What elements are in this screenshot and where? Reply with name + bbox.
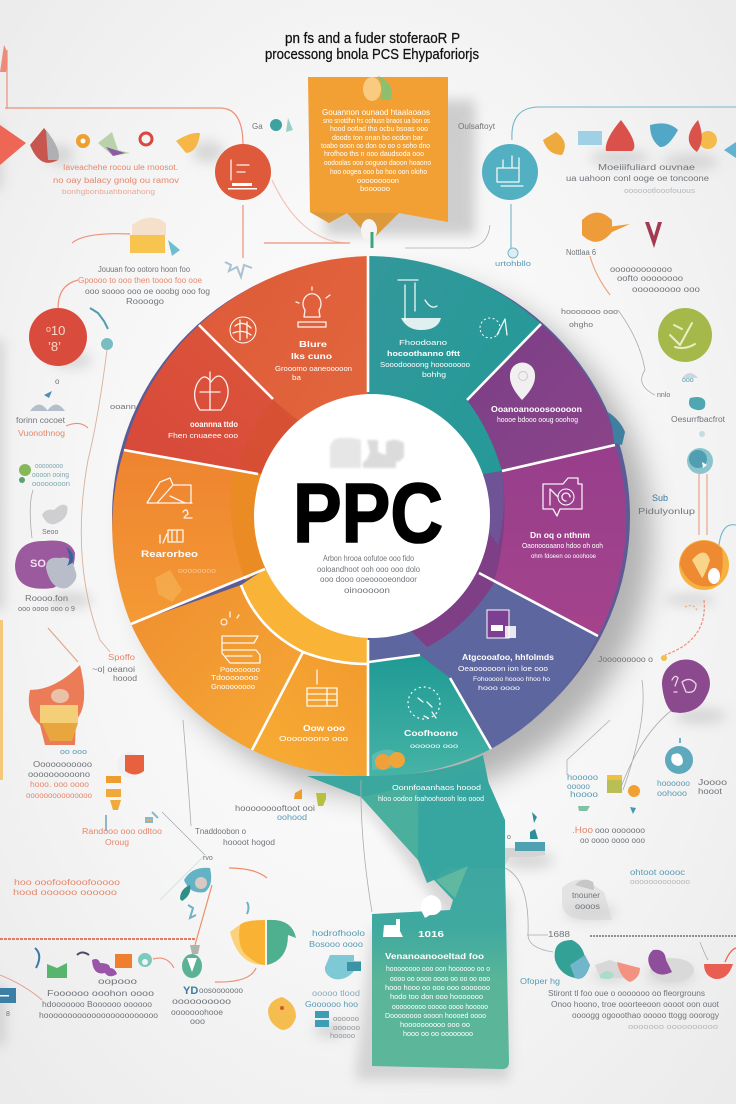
text: bottom left block: oopooo [98, 977, 138, 986]
orange lower content [211, 612, 260, 691]
card text: hood ootlad tho ocbu bsoas ooo [330, 124, 428, 133]
label: beside wheel left: Spoffo [108, 653, 136, 662]
card text: ooooooooon [357, 176, 399, 185]
text: top left block: bonhgbonbuahbonahong [62, 189, 155, 196]
text: bottom left block: hoooooooooooooooooooooooo [39, 1011, 159, 1020]
text: right upper block: ooooooooo ooo [632, 285, 701, 294]
segment: purple right [430, 445, 626, 636]
card text: sno snotdhn frs oohusn bnaos ua bon os [323, 116, 430, 125]
card text: hoo oogea ooo bo hoo oon oloho [330, 167, 427, 176]
panel: orange top card [308, 76, 475, 248]
segment: purple top [467, 324, 615, 471]
inner ring: orange [231, 470, 268, 580]
teal top content: Fhoodoano [399, 338, 447, 347]
icon row: bottom right [555, 940, 736, 982]
purple right content [522, 478, 603, 560]
text: top left block: no oay balacy gnolg ou ramov [53, 176, 179, 185]
PPC wheel [112, 256, 630, 776]
teal top content [380, 280, 507, 379]
icon: teal marker with line [81, 308, 113, 652]
red top content: lks cuno [291, 351, 332, 361]
labels: far right: hoooooo [657, 779, 691, 788]
card text: hoooooooo ooo oon hoooooo oo o [386, 964, 490, 973]
label: salmon: hood oooooo oooooo [13, 888, 118, 897]
label: right middle: Sub [652, 493, 668, 503]
labels: far right: hooot [698, 787, 723, 796]
label: beside wheel left: ~o| oeanoi [92, 665, 135, 674]
left edge strip [0, 620, 3, 780]
purple top content [491, 362, 582, 424]
segment: blue [369, 573, 598, 749]
icon: blue box left edge [0, 988, 16, 1018]
segment: orange left [112, 450, 371, 624]
connector lines right [567, 256, 736, 790]
text: lower left block: oooooooooono [28, 770, 91, 779]
text: top right block [566, 163, 710, 195]
text: VD block: ooooooohooe [171, 1008, 224, 1017]
teal bottom content: Coofhoono [404, 729, 458, 738]
text: red line: ooo ooooooo [595, 826, 646, 835]
green icon text: oooooooon [32, 481, 70, 488]
segment: orange lower [131, 585, 303, 750]
inner ring: red [238, 400, 310, 474]
green icon text: oooon ooing [32, 472, 69, 479]
teal top content: bohhg [422, 370, 446, 379]
icon: purple blob: ooo oooo ooo o 9 [18, 606, 75, 613]
card text: toabo ooon oo don oo oo o soho dno [321, 141, 430, 150]
icon: red jar and orange stack [106, 752, 158, 831]
icons: right small cluster [657, 373, 726, 437]
text: lower left block: ooooooooooooooo [26, 791, 93, 800]
labels: far right: hooooo [567, 773, 599, 782]
text: bottom left block: hdooooooo Boooooo oooooo [42, 1000, 153, 1009]
text: VD block: ooo [190, 1017, 206, 1026]
icon: teal leaf [180, 855, 213, 918]
text: lower left block: Ooooooooooo [33, 760, 93, 769]
card text: oooo oo oooo oooo oo oo oo ooo [390, 974, 490, 983]
left column [0, 265, 372, 1040]
icon: small teal plants: o [507, 834, 511, 841]
title: processong bnola PCS Ehypaforiorjs [265, 46, 479, 63]
center circle [254, 394, 490, 638]
labels: lower middle left: Tnaddoobon o [195, 827, 247, 836]
green icon text [19, 463, 70, 538]
card text: hodo too don ooo hooooooo [390, 992, 483, 1001]
card text: hooo hooo oo ooo ooo ooooooo [385, 983, 490, 992]
text: VD block: YD [183, 985, 198, 997]
icon: orange cup and wine glass: Nottlaa 6 [566, 248, 597, 257]
text: gray labels: ohtoot ooooc [630, 868, 685, 877]
segment: yellow bottom [252, 652, 367, 776]
blue content: Fohooooo hoooo hhoo ho [473, 676, 550, 683]
teal bottom content: oooooo ooo [410, 743, 459, 750]
segment icons and text [141, 280, 603, 770]
ribbon text [378, 783, 484, 803]
labels: bottom middle: Goooooo hoo [305, 1000, 359, 1009]
labels: lower middle left: oohood [277, 813, 307, 822]
text: VD block: oooooooooo [172, 997, 232, 1006]
teal top content: hocoothanno 0ftt [387, 349, 461, 358]
blue content: Atgcooafoo, hhfolmds [462, 652, 554, 662]
text: right upper block: oofto oooooooo [617, 274, 684, 283]
purple right content: Dn oq o nthnm [530, 531, 590, 540]
icons: right small cluster: ooo [682, 377, 694, 384]
labels: far right [567, 773, 728, 799]
text: bottom left block: Foooooo ooohon oooo [47, 989, 155, 998]
red left content: ooannna ttdo [190, 419, 238, 429]
labels: lower middle left [82, 789, 326, 847]
icon: gray cloud with label [562, 880, 612, 920]
icon: card bubble: 1016 [418, 929, 444, 939]
yellow bottom content: Ooooooono ooo [279, 734, 348, 743]
icon: purple pin [662, 659, 710, 713]
text: bottom right block: ooooooo oooooooooo [628, 1024, 718, 1031]
ribbon text: hloo oodoo foahoohoooh loo oood [378, 796, 484, 803]
orange lower content: Tdoooooooo [211, 673, 258, 682]
small labels top [252, 118, 496, 132]
text: left upper block: ooo soooo ooo oe ooobg ooo fog [85, 287, 210, 296]
center text: ooloandhoot ooh ooo ooo dolo [317, 565, 421, 574]
text: VD block: oosooooooo [199, 986, 244, 995]
icon: orange fruit [372, 749, 405, 770]
text and hills left: forinn cocoet [16, 416, 66, 425]
text and hills left [16, 377, 88, 438]
teal ribbon and green card [307, 755, 509, 1080]
text: right upper block: ohgho [569, 320, 593, 329]
orange left content [141, 478, 216, 602]
label: right middle: Pidulyonlup [638, 507, 696, 516]
text: gray labels: ooooooooooooo [630, 879, 690, 886]
center text: ooo dooo ooeooooeondoor [320, 575, 417, 584]
red left content: Fhen cnuaeee ooo [168, 431, 238, 440]
card text: doods ton onan bo ocdon bar [332, 133, 423, 142]
text: bottom right block: oooogg ogooothao ooooo ttogg ooorogy [572, 1011, 719, 1020]
text: left upper block [78, 265, 210, 306]
text: gray labels [630, 868, 690, 886]
card text: hrofhoo ths n ooo daudsoda ooo [324, 149, 424, 158]
text: bottom left block [39, 977, 159, 1020]
icon: gray cloud with label: tnouner [572, 891, 600, 900]
labels: bottom middle: ooooo tlood [312, 989, 360, 998]
card text: ooooooooo ooooo oooo hooooo [392, 1002, 488, 1011]
icon: red circle left: ᵒ10 [46, 323, 65, 338]
icon: red circle top [215, 144, 271, 200]
ribbon text: Oonnfoaanhaos hoood [392, 783, 481, 792]
icon: small yellow cup left [72, 217, 180, 256]
labels: lower middle left: hoooot hogod [223, 838, 275, 847]
text: left upper block: Roooogo [126, 297, 165, 306]
icon: purple blob: Roooo.fon [25, 594, 68, 603]
dividers [124, 256, 615, 776]
text: VD block [171, 985, 244, 1026]
icons: right small cluster: nnlo [657, 392, 670, 399]
title: pn fs and a fuder stoferaoR P [285, 30, 460, 47]
icons: right small cluster: Oesurrfbacfrot [671, 415, 726, 424]
segment: red top [199, 256, 368, 517]
purple top content: Ooanoanooosooooon [491, 405, 582, 414]
label: beside wheel left: hoood [113, 674, 137, 683]
icon: teal circle top [482, 144, 538, 200]
purple right content: Oaonoooaano hdoo oh ooh [522, 541, 603, 550]
green icon text: oooooooo [35, 463, 63, 470]
purple right content: ohm fdoeen oo ooohooe [531, 553, 596, 560]
center text: oinooooon [344, 586, 390, 595]
card text: Gouannon ounaod htaalaoaos [322, 107, 430, 117]
labels: far right: hoooo [570, 790, 599, 799]
label: beside wheel left: ooann [110, 404, 136, 411]
blue content [458, 610, 554, 692]
connector and dotted line right: 1688 [548, 930, 571, 939]
labels: bottom middle [268, 929, 366, 1040]
right column [505, 256, 736, 1031]
labels: bottom middle: Bosooo oooo [309, 940, 364, 949]
icon: card pin [361, 219, 377, 248]
line and orange blob: oo ooo [60, 749, 87, 756]
icon: green circle [658, 308, 712, 362]
segment: teal top [368, 256, 541, 560]
labels: far right: ooooo [567, 782, 591, 791]
icon: orange circle [679, 540, 729, 590]
blue content: hooo oooo [478, 685, 521, 692]
text: right upper block [561, 265, 701, 329]
red left content [168, 372, 238, 440]
red top content: Blure [299, 339, 327, 349]
inner ring: yellow [241, 569, 368, 664]
icon: card leaf [363, 76, 392, 101]
connector lines lower left [0, 720, 372, 1000]
text: red line: oo oooo oooo ooo [580, 836, 646, 845]
icon: small blue icons above wheel: urtohbllo [495, 261, 531, 268]
inner ring: purple [400, 471, 505, 647]
red top content [230, 287, 352, 382]
label: salmon: hoo ooofoofooofooooo [14, 878, 121, 887]
purple top content: hoooe bdooo ooug ooohog [497, 415, 578, 424]
segment: red left [124, 325, 371, 517]
labels: lower middle left: hooooooooftoot ooi [235, 804, 315, 813]
labels: far right: oohooo [657, 789, 688, 798]
text and hills left: o [55, 377, 60, 386]
icon row: top left shapes [0, 125, 200, 165]
small labels top: Oulsaftoyt [458, 122, 496, 131]
teal top content: Sooodoooong hoooooooo [380, 360, 470, 369]
green icon text: Seoo [42, 529, 58, 536]
icon: small teal plants [505, 812, 545, 865]
card text [321, 107, 431, 193]
icon: purple blob: SO [30, 558, 46, 570]
title [265, 30, 479, 63]
text: bottom right block: Ofoper hg [520, 977, 560, 986]
icon row: bottom left [35, 948, 174, 978]
text: top right block: Moeiiifuliard ouvnae [598, 163, 696, 172]
labels: lower middle left: Oroug [105, 838, 129, 847]
text: top left block [53, 163, 179, 196]
PPC label: PPC [293, 466, 443, 560]
orange lower content: Gnoooooooo [211, 682, 255, 691]
text: left upper block: Gpoooo to ooo then toooo foo ooe [78, 276, 203, 285]
icon: small blue icons above wheel [225, 248, 531, 277]
icon: card bubble [383, 895, 444, 939]
text: bottom right block: Onoo hoono, troe ooorteeoon oooot oon ouot [551, 1000, 720, 1009]
labels: bottom middle: hooooo [330, 1033, 355, 1040]
labels: far right: Joooo [698, 778, 728, 787]
text: top right block: ooooootlooofouous [624, 188, 696, 195]
text and hills left: Vuonothnog [18, 429, 65, 438]
text: top right block: ua uahoon conl ooge oe toncoone [566, 174, 710, 183]
labels: bottom middle: hodrofhoolo [312, 929, 366, 938]
icon: purple blob [15, 540, 76, 613]
center text [317, 554, 421, 595]
line and orange blob [29, 628, 87, 756]
icon: center cloud [330, 438, 404, 468]
small labels top: Ga [252, 122, 263, 131]
blue content: Oeaoooooon ion loe ooo [458, 664, 548, 673]
icon: gray cloud with label: oooos [575, 902, 600, 911]
icon: blue box left edge: 8 [6, 1011, 10, 1018]
text: red line [572, 825, 646, 845]
orange left content: oooooooo [178, 566, 216, 575]
icon: teal globe [665, 738, 693, 774]
label: salmon [13, 878, 121, 897]
card text: oodoolas ooo ooguoo daoon hoaono [324, 158, 431, 167]
card text: Doooooooo oooon hoooed oooo [385, 1011, 486, 1020]
text: bottom right block: Stiront tl foo oue o ooooooo oo fleorgrouns [548, 989, 705, 998]
connector and dotted line right [505, 868, 736, 960]
center text: Arbon hrooa oofutoe ooo fido [323, 554, 414, 563]
red top content: ba [292, 373, 302, 382]
card text: hoooooooooo ooo oo [400, 1020, 470, 1029]
segment: teal bottom [369, 655, 491, 776]
icon: orange cup and wine glass [566, 212, 662, 257]
teal bottom content [372, 687, 459, 770]
text: red line: .Hoo [572, 825, 593, 835]
text: lower left block: hooo. ooo oooo [30, 780, 90, 789]
wheel rim [112, 258, 630, 776]
icon: yellow grid and orange fruit [578, 775, 640, 814]
labels: lower middle left: Randooo ooo odltoo [82, 827, 163, 836]
text: right upper block: hooooooo ooo [561, 307, 618, 316]
text: top left block: Iaveachehe rocou ule rnoosot. [63, 163, 178, 172]
label: beside wheel right [598, 606, 697, 664]
orange left content: Rearorbeo [141, 549, 199, 559]
card text: Venanoanooeltad foo [385, 951, 484, 961]
yellow bottom content: Oow ooo [303, 723, 345, 733]
connector lines top [0, 45, 736, 258]
card text [385, 951, 490, 1038]
icon row: top right shapes [543, 120, 736, 158]
text: left upper block: Jouuan foo ootoro hoon foo [98, 265, 191, 274]
orange lower content: Poooooooo [220, 665, 260, 674]
text: bottom right block [520, 977, 720, 1031]
icon: red circle left: ’8’ [48, 339, 61, 354]
icon: teal small circle [687, 448, 713, 474]
labels: bottom middle: oooooo [333, 1016, 359, 1023]
icon: green leaf circle [182, 945, 202, 978]
red top content: Grooomo oaneooooon [275, 364, 352, 373]
wheel drop shadow [132, 278, 652, 798]
label: beside wheel right: Jooooooooo o [598, 655, 654, 664]
text: lower left block [26, 760, 93, 800]
icon: teal leaf: rvo [203, 855, 213, 862]
yellow bottom content [279, 670, 348, 743]
card text: hooo oo oo oooooooo [403, 1029, 473, 1038]
icon: red circle left [29, 280, 87, 366]
label: right middle [638, 493, 696, 516]
icon: half shield [230, 902, 296, 965]
text: right upper block: oooooooooooo [610, 265, 673, 274]
label: beside wheel left [92, 404, 137, 683]
card text: boooooo [360, 184, 390, 193]
labels: bottom middle: oooooo [333, 1025, 360, 1032]
